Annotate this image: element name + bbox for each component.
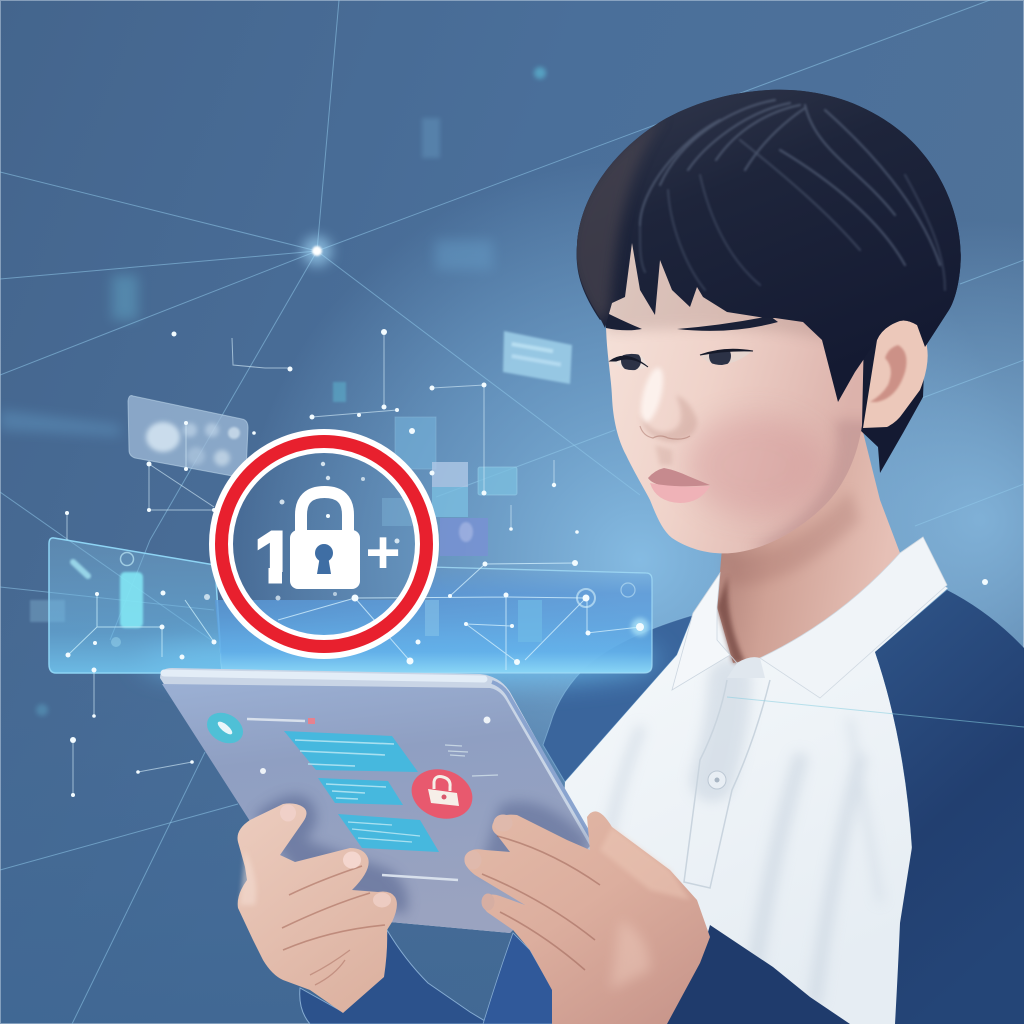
- left hand: [238, 803, 397, 1013]
- panel: central and right hologram card: [215, 563, 652, 673]
- right sleeve: [875, 590, 1024, 1024]
- badge red ring: [222, 442, 426, 646]
- upper left sleeve: [543, 615, 693, 782]
- ear: [863, 321, 928, 428]
- face: [606, 240, 880, 560]
- panel: top-right hologram card: [503, 331, 572, 384]
- right hand: [464, 811, 710, 1024]
- icon: glowing network star: [302, 236, 332, 266]
- blurred background data cards: [0, 67, 546, 716]
- circuit lines: [67, 332, 554, 795]
- eyes: [608, 348, 754, 370]
- tablet: [160, 668, 596, 933]
- icon: padlock: [290, 492, 360, 589]
- hair side highlight: [576, 126, 655, 322]
- shirt folds: [610, 680, 880, 1000]
- collar: [672, 537, 947, 698]
- panel: large left hologram card: [49, 538, 222, 673]
- shirt body: [552, 560, 948, 1024]
- label: 1: 1: [254, 516, 295, 599]
- panel: top-left hologram card: [128, 396, 248, 477]
- faint line across shirt: [727, 697, 1024, 727]
- hair back: [577, 90, 961, 473]
- tablet screen content: [202, 707, 498, 880]
- label: plus: +: [365, 519, 401, 586]
- shirt placket and button: [684, 680, 770, 888]
- mouth: [648, 468, 710, 503]
- sparkle dots: [65, 329, 988, 797]
- eyebrows: [605, 312, 778, 331]
- neck: [717, 420, 900, 663]
- badge white ring: [221, 441, 427, 647]
- left lower sleeve and right cuff: [300, 925, 850, 1024]
- panel: glow behind tablet: [140, 634, 660, 686]
- nose: [640, 426, 690, 439]
- hair strands: [640, 100, 945, 290]
- hair front: [577, 90, 961, 402]
- panel: small floating cards: [333, 382, 517, 556]
- label: 1: [258, 530, 283, 584]
- age restriction badge: [221, 441, 427, 647]
- neck shading: [717, 490, 860, 663]
